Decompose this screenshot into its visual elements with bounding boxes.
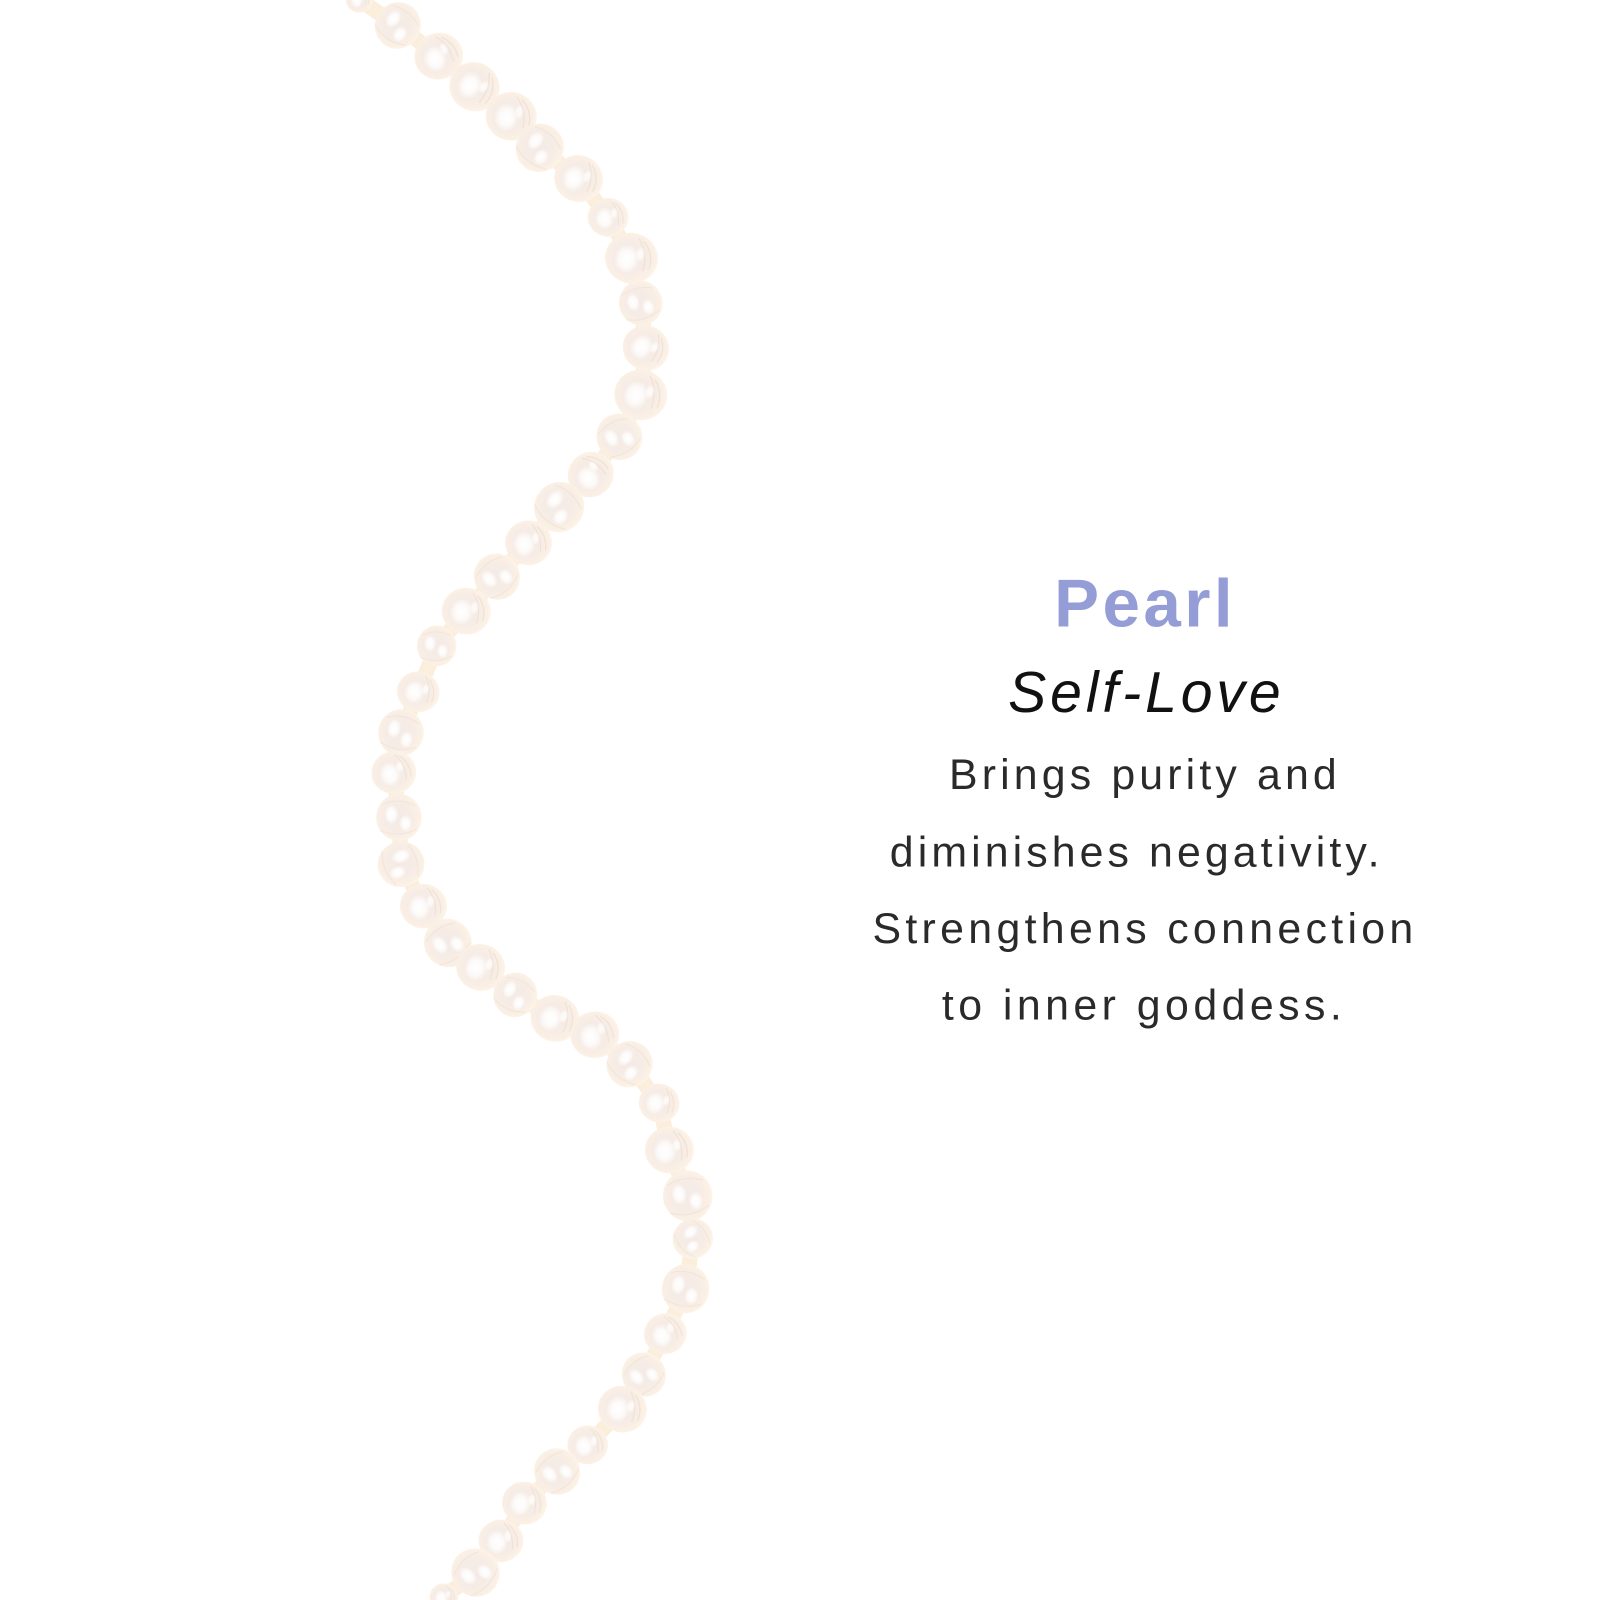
necklace cord knots	[359, 0, 693, 1597]
body text: to inner goddess.	[942, 981, 1342, 1029]
pearls	[346, 0, 721, 1600]
subheading: Self-Love: Self-Love	[1008, 661, 1281, 725]
text block: pearl description	[872, 567, 1413, 1029]
heading: Pearl: Pearl	[1054, 567, 1233, 642]
body text: diminishes negativity.	[890, 828, 1380, 876]
body text: Strengthens connection	[872, 905, 1413, 953]
pearl necklace	[346, 0, 721, 1600]
body text	[872, 751, 1413, 1029]
body text: Brings purity and	[949, 751, 1337, 799]
